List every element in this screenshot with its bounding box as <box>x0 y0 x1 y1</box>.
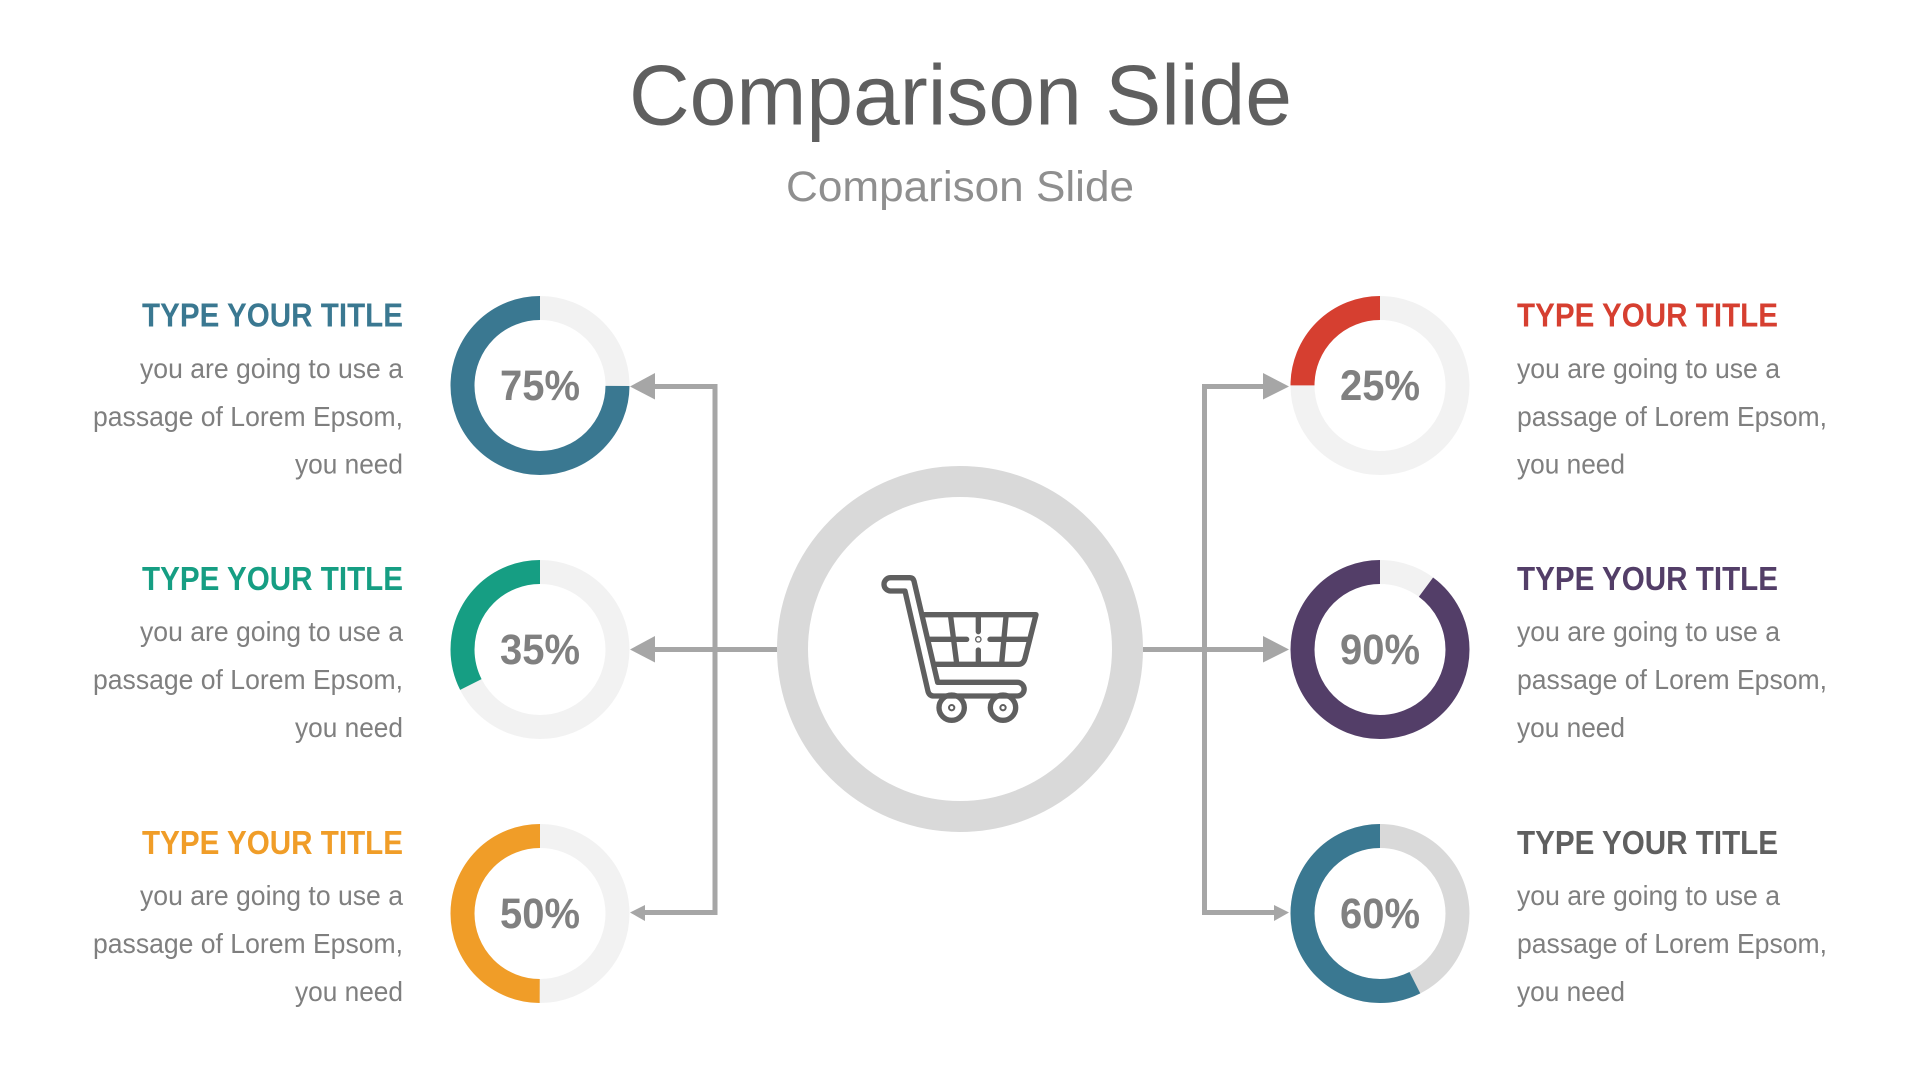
body text: passage of Lorem Epsom, <box>1517 401 1827 432</box>
body text: passage of Lorem Epsom, <box>93 401 403 432</box>
heading: TYPE YOUR TITLE <box>1517 296 1778 334</box>
body text: passage of Lorem Epsom, <box>93 664 403 695</box>
donut 50% <box>462 836 618 991</box>
body text <box>93 880 403 1007</box>
body text <box>93 616 403 743</box>
panel: item 25% right <box>1302 296 1827 480</box>
donut 75%: 75% <box>500 362 580 410</box>
title: Comparison Slide <box>629 48 1292 144</box>
body text: you need <box>1517 976 1625 1007</box>
connector arrows: left <box>630 373 777 921</box>
body text: you are going to use a <box>1517 880 1780 911</box>
donut 90% <box>1302 572 1458 727</box>
body text: you are going to use a <box>1517 353 1780 384</box>
donut 60%: 60% <box>1340 890 1420 938</box>
body text: you are going to use a <box>1517 616 1780 647</box>
donut 90%: 90% <box>1340 626 1420 674</box>
body text: passage of Lorem Epsom, <box>93 928 403 959</box>
heading: TYPE YOUR TITLE <box>142 296 403 334</box>
heading: TYPE YOUR TITLE <box>142 824 403 861</box>
panel: item 90% right <box>1302 560 1827 743</box>
donut 60% <box>1302 836 1458 991</box>
body text: you need <box>295 712 403 743</box>
body text <box>1517 353 1827 480</box>
body text: you need <box>1517 448 1625 480</box>
donut 75% <box>462 308 618 463</box>
body text: you are going to use a <box>140 880 403 911</box>
body text: you are going to use a <box>140 353 403 384</box>
donut 35%: 35% <box>500 626 580 674</box>
connector arrows: right <box>1143 373 1289 921</box>
body text: you need <box>1517 712 1625 743</box>
panel: item 50% left <box>93 824 618 1007</box>
heading: TYPE YOUR TITLE <box>1517 824 1778 861</box>
body text: you are going to use a <box>140 616 403 647</box>
body text <box>1517 880 1827 1007</box>
donut 35% <box>462 572 618 727</box>
panel: item 35% left <box>93 560 618 743</box>
body text: you need <box>295 976 403 1007</box>
icon: shopping cart <box>884 578 1036 720</box>
heading: TYPE YOUR TITLE <box>1517 560 1778 597</box>
body text: passage of Lorem Epsom, <box>1517 928 1827 959</box>
body text <box>1517 616 1827 743</box>
panel: item 75% left <box>93 296 618 480</box>
panel: item 60% right <box>1302 824 1827 1007</box>
central ring <box>792 482 1128 816</box>
subtitle: Comparison Slide <box>786 163 1134 211</box>
donut 25% <box>1302 308 1458 463</box>
body text <box>93 353 403 480</box>
donut 50%: 50% <box>500 890 580 938</box>
heading: TYPE YOUR TITLE <box>142 560 403 597</box>
body text: passage of Lorem Epsom, <box>1517 664 1827 695</box>
donut 25%: 25% <box>1340 362 1420 410</box>
body text: you need <box>295 448 403 480</box>
